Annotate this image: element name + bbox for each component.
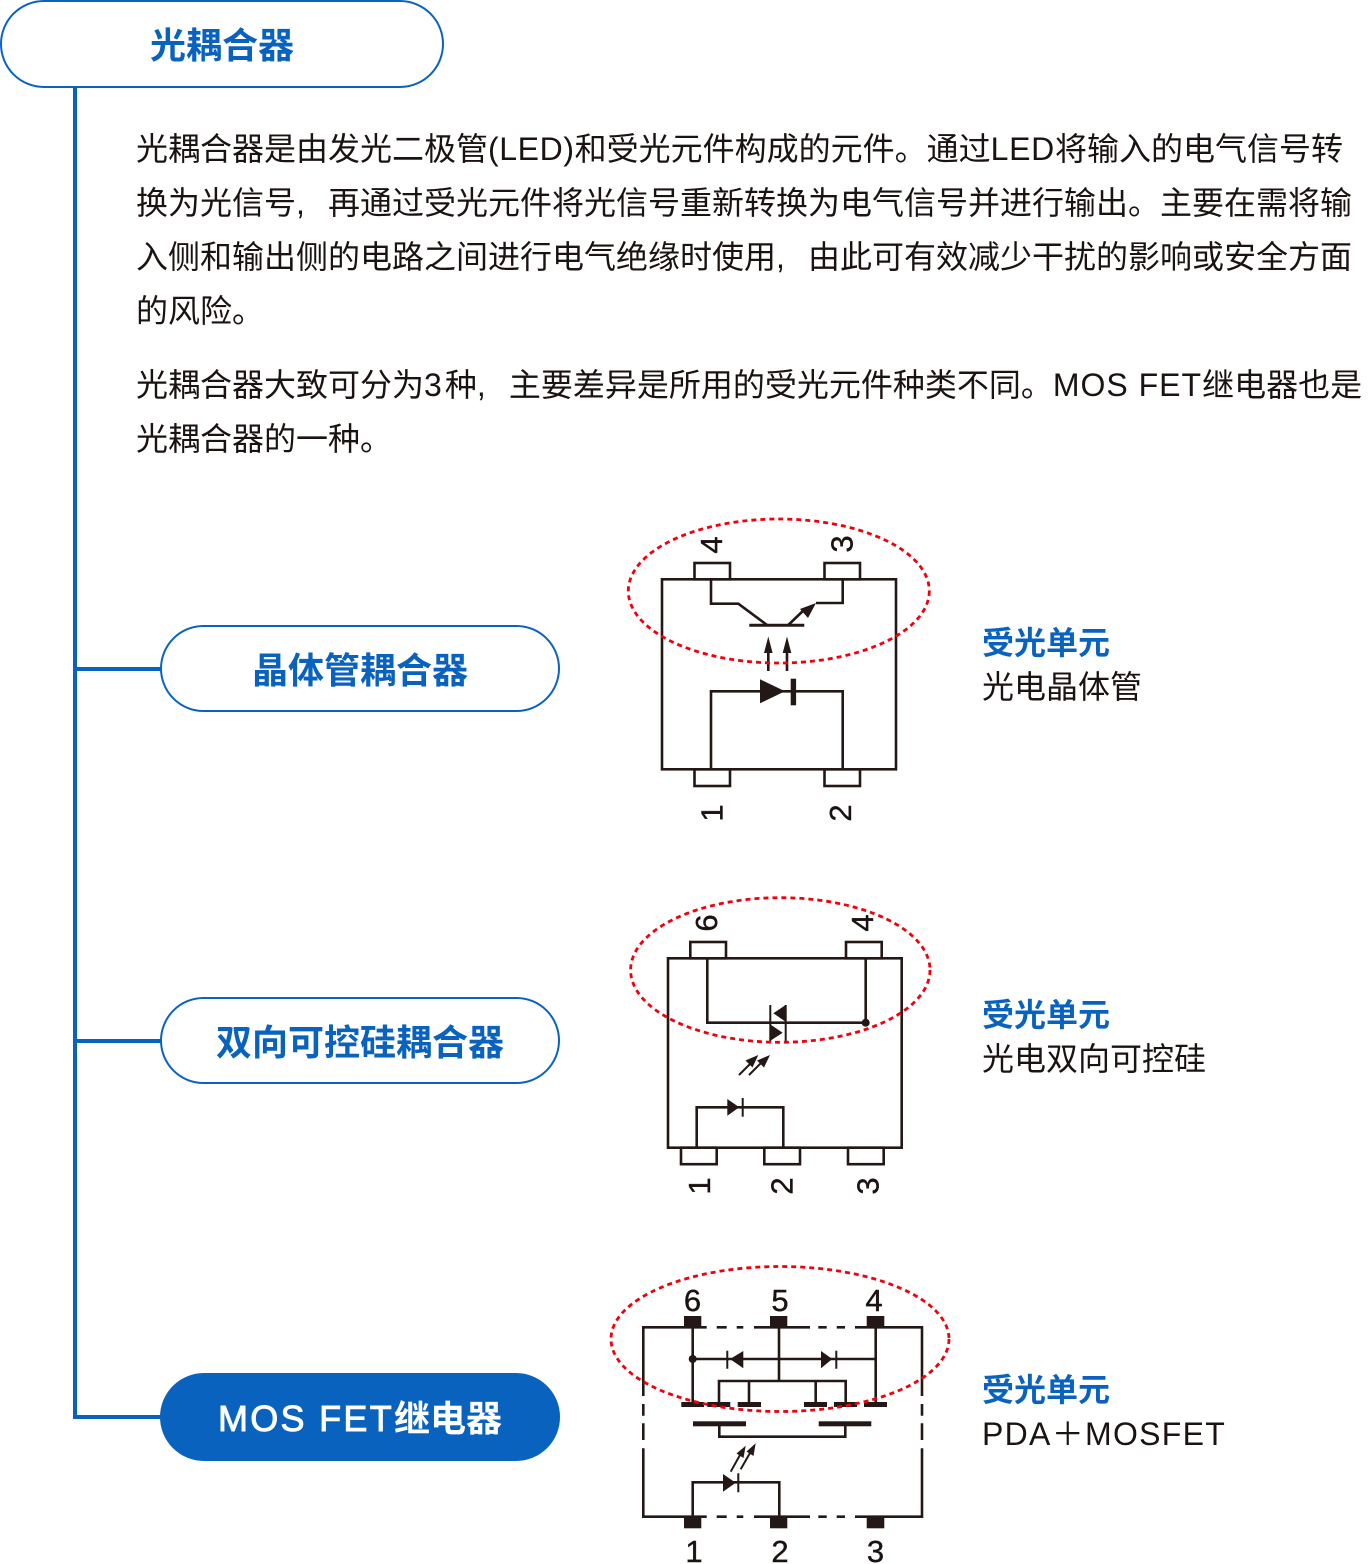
text block: description paragraph 1: , — [776, 239, 785, 275]
label: 光电双向可控硅: 光电双向可控硅 — [982, 1040, 1206, 1076]
diagram: triac coupler: 3 — [850, 1177, 886, 1195]
text block: description paragraph 1: 入侧和输出侧的电路之间进行电气绝缘时使用 由此可有效减少干扰的影响或安全方面 — [136, 239, 1352, 275]
label: PDA＋MOSFET — [982, 1372, 1226, 1452]
pill: MOS FET继电器 — [160, 1373, 560, 1461]
diagram: MOS FET relay — [610, 1265, 950, 1564]
label: 光电双向可控硅 — [982, 996, 1206, 1076]
label: 光电晶体管: 光电晶体管 — [982, 668, 1142, 704]
pill: 双向可控硅耦合器 — [160, 997, 560, 1084]
diagram: MOS FET relay: 4 — [865, 1283, 883, 1318]
text block: description paragraph 2 — [136, 367, 1362, 457]
text block: description paragraph 1: , — [296, 185, 305, 221]
diagram: MOS FET relay: 5 — [771, 1283, 789, 1318]
pill: 双向可控硅耦合器: 双向可控硅耦合器 — [216, 1022, 504, 1063]
label: PDA＋MOSFET: 受光单元 — [982, 1372, 1110, 1408]
diagram: transistor coupler: 4 — [694, 536, 729, 554]
diagram: transistor coupler: 3 — [824, 535, 860, 553]
text block: description paragraph 1 — [136, 131, 1352, 329]
text block: description paragraph 1: 光耦合器是由发光二极管(LED)和受光元件构成的元件。通过LED将输入的电气信号转 — [136, 131, 1343, 167]
label: 光电晶体管: 受光单元 — [982, 624, 1110, 660]
diagram: transistor coupler: 2 — [823, 804, 858, 822]
text block: description paragraph 1: 的风险。 — [136, 293, 264, 329]
pill: 晶体管耦合器 — [160, 625, 560, 712]
text block: description paragraph 2: 光耦合器大致可分为3种 主要差异是所用的受光元件种类不同。MOS FET继电器也是 — [136, 367, 1362, 403]
diagram: triac coupler: 6 — [689, 914, 724, 932]
heading: 光耦合器: 光耦合器 — [150, 25, 294, 66]
pill: MOS FET继电器: MOS FET继电器 — [218, 1398, 502, 1439]
diagram: transistor coupler — [626, 518, 931, 822]
diagram: triac coupler: 4 — [845, 914, 880, 932]
heading: 光耦合器 — [0, 0, 444, 88]
diagram: triac coupler — [629, 896, 932, 1195]
diagram: transistor coupler: 1 — [694, 804, 730, 822]
text block: description paragraph 2: 光耦合器的一种。 — [136, 421, 392, 457]
label: PDA＋MOSFET: PDA＋MOSFET — [982, 1416, 1226, 1452]
pill: 晶体管耦合器: 晶体管耦合器 — [252, 650, 468, 691]
connector tree lines — [73, 88, 160, 1419]
text block: description paragraph 2: , — [477, 367, 486, 403]
diagram: triac coupler: 2 — [764, 1177, 800, 1195]
label: 光电双向可控硅: 受光单元 — [982, 996, 1110, 1032]
label: 光电晶体管 — [982, 624, 1142, 704]
diagram: triac coupler: 1 — [682, 1177, 717, 1195]
text block: description paragraph 1: 换为光信号 再通过受光元件将光信号重新转换为电气信号并进行输出。主要在需将输 — [136, 185, 1352, 221]
diagram: MOS FET relay: 6 — [684, 1283, 701, 1318]
